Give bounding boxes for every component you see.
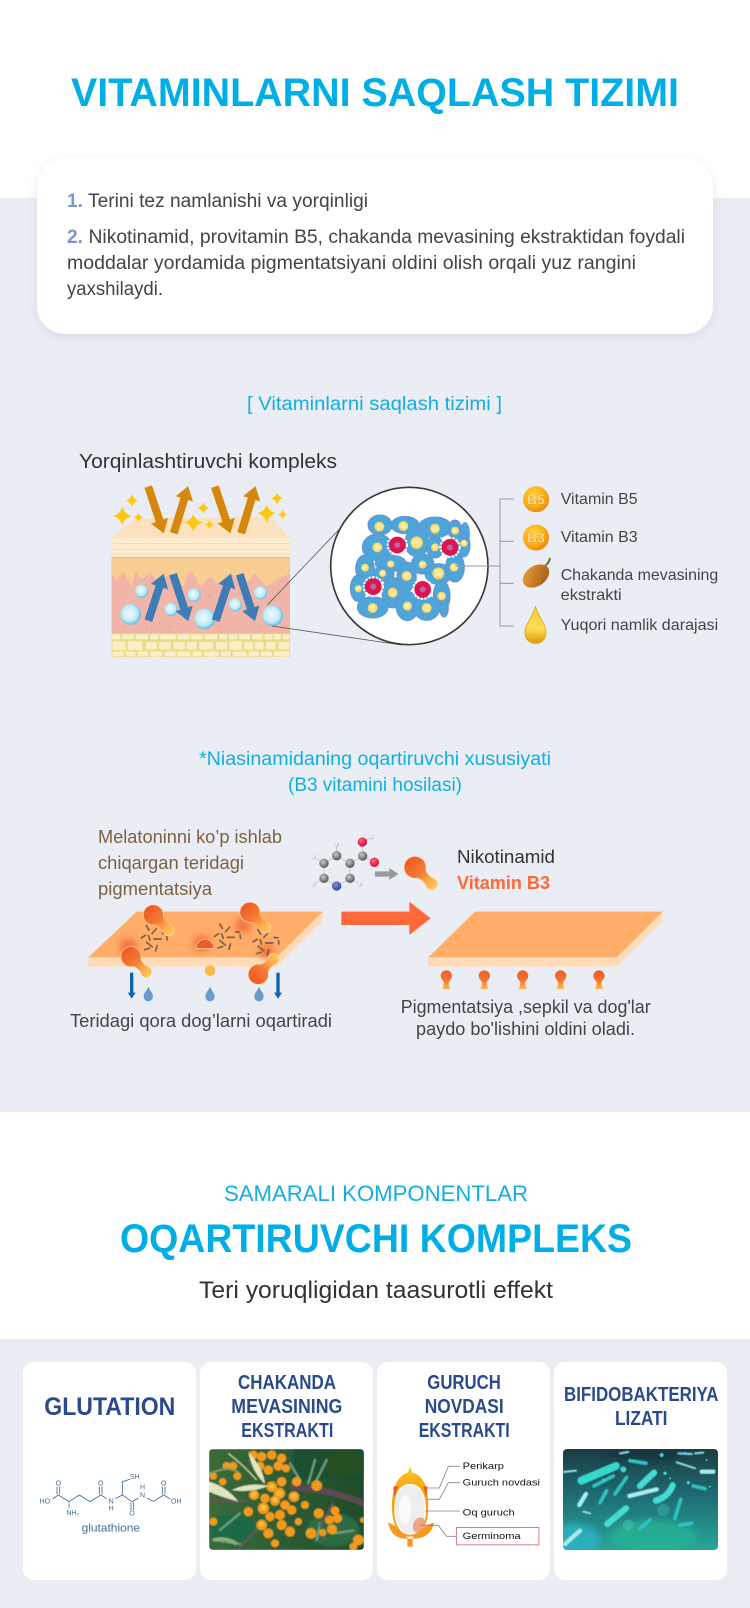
ingredient list — [518, 486, 718, 644]
section heading: vitamin system: [ Vitaminlarni saqlash tizimi ] — [247, 394, 502, 415]
nicotinamide molecule — [311, 835, 379, 891]
overline heading: SAMARALI KOMPONENTLAR — [224, 1181, 528, 1206]
chemical structure: OH — [171, 1499, 181, 1506]
card title: GLUTATION — [44, 1393, 175, 1421]
vitamin spots — [355, 521, 468, 613]
pigment flecks — [141, 925, 167, 952]
chemical structure: O — [56, 1480, 62, 1487]
section heading: niacinamide — [199, 749, 551, 796]
rice grain diagram: Perikarp — [463, 1461, 504, 1471]
item: vitamin B3: B3 — [527, 530, 545, 546]
small grey arrow — [375, 868, 398, 880]
item 2 — [67, 227, 685, 300]
caption: prevents pigmentation — [401, 997, 651, 1039]
caption: prevents pigmentation: paydo bo'lishini oldini oladi. — [416, 1019, 635, 1039]
tagline: Teri yoruqligidan taasurotli effekt — [199, 1277, 553, 1304]
sparkles — [113, 492, 287, 532]
text: pigmentation caption — [98, 827, 282, 899]
chemical structure — [40, 1474, 181, 1535]
dermis — [112, 558, 290, 634]
card: sea buckthorn — [200, 1362, 373, 1580]
skin cross-section illustration — [112, 483, 402, 657]
text: pigmentation caption: chiqargan teridagi — [98, 853, 244, 873]
item 2: 2. — [67, 227, 83, 248]
text: pigmentation caption: Melatoninni ko’p ishlab — [98, 827, 282, 847]
item: sea buckthorn: ekstrakti — [561, 587, 622, 604]
item: vitamin B3: Vitamin B3 — [561, 529, 638, 546]
chemical structure: O — [129, 1511, 135, 1518]
moisture bubbles — [120, 584, 283, 629]
blue arrows — [140, 571, 264, 624]
card title — [231, 1372, 342, 1442]
skin plate with pigmentation — [88, 903, 323, 1001]
magnified cell circle — [331, 487, 488, 645]
white band: effective components — [0, 1112, 750, 1339]
section heading: niacinamide: *Niasinamidaning oqartiruvchi xususiyati — [199, 749, 551, 770]
skin top layer — [112, 517, 290, 538]
item: vitamin B5: Vitamin B5 — [561, 491, 638, 508]
brown arrows — [140, 483, 264, 536]
clean skin plate — [428, 912, 663, 989]
card title — [419, 1372, 510, 1442]
item: vitamin B5 — [523, 486, 638, 512]
chemical structure: NH₂ — [66, 1510, 79, 1517]
card title: CHAKANDA — [238, 1372, 336, 1394]
item: sea buckthorn — [518, 558, 718, 604]
main heading: OQARTIRUVCHI KOMPLEKS — [120, 1217, 632, 1261]
item 1: 1. — [67, 191, 83, 212]
item: vitamin B3 — [523, 524, 638, 550]
ingredient bracket — [455, 499, 514, 626]
card title: BIFIDOBAKTERIYA — [564, 1384, 718, 1406]
chemical structure: N — [140, 1492, 145, 1499]
card: bifidobacteria — [547, 1362, 727, 1580]
vitamin molecules — [144, 905, 174, 936]
card title: NOVDASI — [425, 1396, 504, 1418]
water drops — [144, 987, 264, 1001]
blue arrows down — [132, 973, 278, 993]
item 2: moddalar yordamida pigmentatsiyani oldini olish orqali yuz rangini — [67, 253, 636, 274]
section heading: niacinamide: (B3 vitamini hosilasi) — [288, 775, 462, 796]
item: moisture — [525, 606, 718, 644]
red glows — [120, 917, 274, 959]
rice grain diagram: Germinoma — [463, 1531, 522, 1541]
rice grain diagram: Oq guruch — [463, 1508, 515, 1518]
chemical structure: N — [109, 1499, 114, 1506]
item: sea buckthorn: Chakanda mevasining — [561, 567, 718, 584]
background: grey lower section — [0, 1339, 750, 1608]
label: nicotinamide vitamin B3 — [457, 847, 555, 893]
card: glutathione — [23, 1362, 196, 1580]
melanin spots — [364, 535, 460, 599]
photo: bacteria — [563, 1449, 718, 1550]
item 1: Terini tez namlanishi va yorqinligi — [88, 191, 368, 212]
collagen bricks — [112, 634, 290, 657]
label: nicotinamide vitamin B3: Vitamin B3 — [457, 873, 550, 893]
item: moisture: Yuqori namlik darajasi — [561, 617, 718, 634]
chemical structure: H — [109, 1506, 114, 1513]
card: rice germ — [377, 1362, 550, 1580]
caption: prevents pigmentation: Pigmentatsiya ,sepkil va dog'lar — [401, 997, 651, 1017]
subheading: brightening complex: Yorqinlashtiruvchi kompleks — [79, 451, 337, 473]
card title: LIZATI — [615, 1408, 668, 1430]
zoom lines — [267, 525, 402, 645]
background: grey upper section — [0, 198, 750, 1112]
card title — [564, 1384, 718, 1430]
caption: whitens dark spots: Teridagi qora dog’larni oqartiradi — [70, 1011, 332, 1031]
rice grain diagram — [388, 1461, 540, 1547]
chemical structure: HO — [40, 1499, 51, 1506]
card background — [37, 158, 713, 334]
rice grain diagram: Guruch novdasi — [463, 1478, 540, 1488]
chemical structure: O — [161, 1480, 167, 1487]
vitamin B3 molecule icon — [404, 857, 437, 890]
item 2: Nikotinamid, provitamin B5, chakanda mevasining ekstraktidan foydali — [88, 227, 685, 248]
item: vitamin B5: B5 — [527, 492, 545, 508]
label: nicotinamide vitamin B3: Nikotinamid — [457, 847, 555, 867]
photo: sea buckthorn berries — [209, 1449, 365, 1551]
card title: EKSTRAKTI — [419, 1420, 510, 1442]
big orange arrow — [341, 902, 431, 935]
chemical structure: O — [98, 1480, 104, 1487]
card title: GURUCH — [427, 1372, 501, 1394]
card title: EKSTRAKTI — [241, 1420, 333, 1442]
card title: MEVASINING — [231, 1396, 342, 1418]
title: VITAMINLARNI SAQLASH TIZIMI — [71, 71, 679, 115]
item 2: yaxshilaydi. — [67, 279, 163, 300]
chemical structure: glutathione — [82, 1523, 140, 1535]
text: pigmentation caption: pigmentatsiya — [98, 879, 213, 899]
small molecules — [441, 970, 452, 989]
chemical structure: SH — [130, 1474, 140, 1481]
panel: summary card — [37, 158, 713, 334]
skin cells — [350, 515, 470, 621]
chemical structure: H — [140, 1485, 145, 1492]
